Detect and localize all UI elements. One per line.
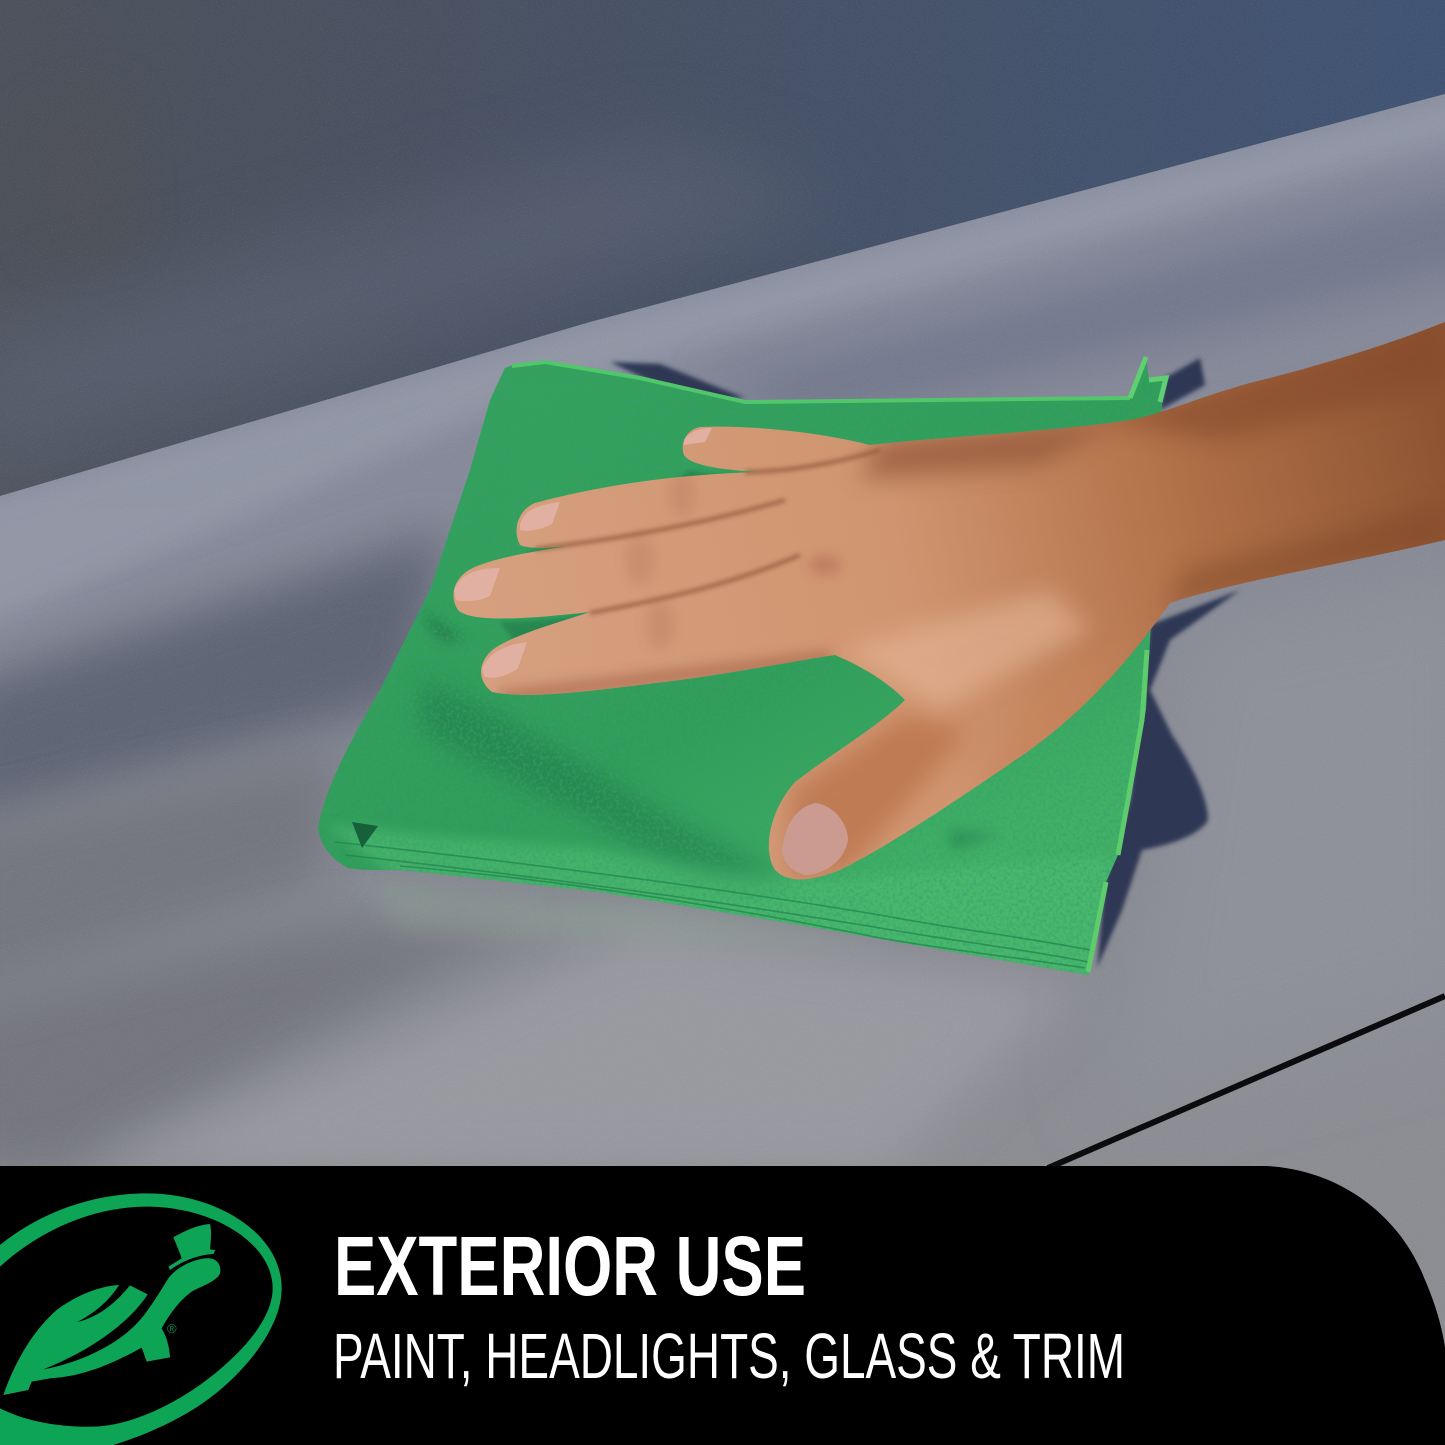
green microfiber towel (300, 340, 1200, 990)
oval ring (0, 1193, 282, 1445)
black caption banner (0, 1166, 1445, 1445)
panel seam line (1048, 996, 1445, 1168)
fingernails (454, 428, 848, 875)
subheading: PAINT, HEADLIGHTS, GLASS & TRIM (333, 1320, 1125, 1392)
turtle top hat (168, 1224, 215, 1270)
finger creases (535, 450, 880, 613)
registered mark: ® (167, 1321, 177, 1336)
hand and arm (453, 320, 1445, 880)
heading: EXTERIOR USE (334, 1219, 806, 1313)
logo: turtle in green oval (0, 1193, 282, 1445)
turtle body (3, 1258, 220, 1395)
towel shadow (610, 358, 1240, 968)
